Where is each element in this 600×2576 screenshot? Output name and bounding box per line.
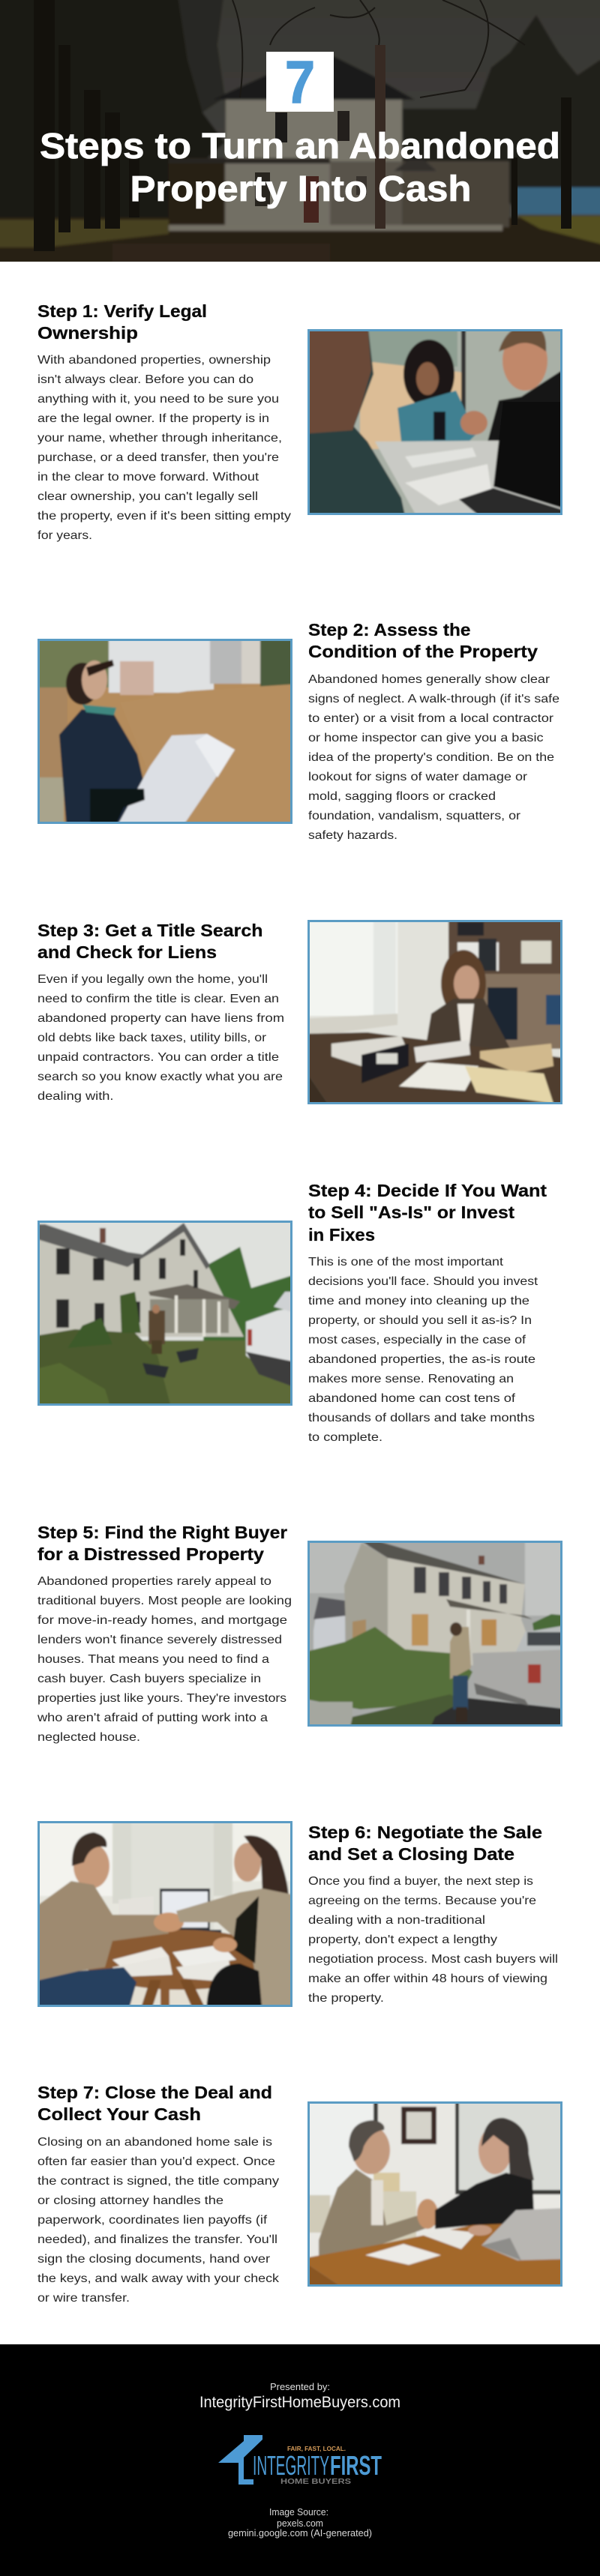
step 6 heading (308, 1823, 542, 1864)
step 2 heading: Step 2: Assess the (308, 620, 471, 640)
step 4 text: abandoned properties, the as-is route (308, 1353, 536, 1366)
step 7 text: often far easier than you'd expect. Once (38, 2155, 275, 2168)
panel: step 6 (30, 1814, 558, 2014)
step 2 text: lookout for signs of water damage or (308, 771, 528, 783)
step 4 text: This is one of the most important (308, 1256, 504, 1269)
step 3 photo: woman at a desk with title files (300, 912, 570, 1112)
title: Steps to Turn an Abandoned (40, 127, 560, 166)
step 3 heading: and Check for Liens (38, 942, 217, 962)
step 2 text: mold, sagging floors or cracked (308, 790, 496, 803)
step 1 heading: Ownership (38, 323, 138, 343)
step 4 text: thousands of dollars and take months (308, 1412, 535, 1424)
step 7 text: sign the closing documents, hand over (38, 2253, 271, 2266)
step 4 text: to complete. (308, 1431, 382, 1444)
logo text: FAIR, FAST, LOCAL. (287, 2445, 346, 2452)
step 1 heading (38, 301, 207, 343)
step 4 text: abandoned home can cost tens of (308, 1392, 516, 1405)
step 4 heading: in Fixes (308, 1225, 375, 1245)
step 4 heading: to Sell "As-Is" or Invest (308, 1203, 514, 1222)
step 5 text (37, 1575, 292, 1744)
presented by: Presented by: (270, 2381, 330, 2392)
step 5 text: lenders won't finance severely distressed (38, 1634, 282, 1646)
number seven badge (266, 49, 334, 115)
panel: step 4 (30, 1181, 547, 1444)
step 1 text: your name, whether through inheritance, (38, 432, 282, 445)
image sources: gemini.google.com (AI-generated) (228, 2528, 372, 2539)
title (40, 127, 560, 209)
step 5 text: houses. That means you need to find a (38, 1653, 269, 1666)
step 2 text: to enter) or a visit from a local contractor (308, 712, 554, 725)
step 3 heading (38, 921, 262, 962)
panel: step 7 (38, 2083, 570, 2305)
step 7 text: Closing on an abandoned home sale is (38, 2136, 272, 2149)
step 3 text: need to confirm the title is clear. Even an (38, 993, 279, 1005)
image sources: Image Source: (269, 2507, 328, 2518)
image sources (228, 2507, 372, 2539)
step 4 photo: neglected white farmhouse with truck (30, 1213, 300, 1413)
step 5 text: traditional buyers. Most people are looking (38, 1595, 292, 1607)
step 2 text: Abandoned homes generally show clear (308, 673, 550, 686)
step 5 text: properties just like yours. They're investors (38, 1692, 286, 1705)
step 3 heading: Step 3: Get a Title Search (38, 921, 262, 940)
logo text: FIRST (330, 2450, 382, 2481)
step 1 heading: Step 1: Verify Legal (38, 301, 207, 321)
number seven badge: 7 (285, 49, 315, 115)
step 6 heading: and Set a Closing Date (308, 1844, 514, 1864)
step 1 text: purchase, or a deed transfer, then you're (38, 451, 279, 464)
footer (0, 2344, 600, 2576)
logo: Integrity First Home Buyers (218, 2435, 382, 2486)
step 6 text: property, don't expect a lengthy (308, 1933, 497, 1946)
step 4 text: most cases, especially in the case of (308, 1334, 526, 1346)
step 7 text (38, 2136, 280, 2305)
step 4 text: makes more sense. Renovating an (308, 1373, 514, 1385)
step 1 text (38, 354, 291, 542)
step 1 text: With abandoned properties, ownership (38, 354, 271, 367)
step 5 photo: boarded-up house, man and pickup (300, 1533, 570, 1734)
step 2 text: signs of neglect. A walk-through (if it's safe (308, 693, 560, 705)
step 2 text: foundation, vandalism, squatters, or (308, 810, 521, 822)
step 1 text: the property, even if it's been sitting empty (38, 510, 291, 523)
step 7 text: the contract is signed, the title company (38, 2175, 279, 2188)
panel: step 3 (38, 912, 570, 1112)
hero photo: abandoned house at dusk (0, 0, 600, 262)
hero banner (0, 0, 600, 285)
step 7 text: or closing attorney handles the (38, 2194, 224, 2207)
step 7 heading: Collect Your Cash (38, 2104, 201, 2124)
step 2 photo: woman holding blueprints (30, 631, 300, 831)
step 6 photo: handshake over a table (30, 1814, 300, 2014)
panel: step 2 (30, 620, 560, 842)
step 5 text: neglected house. (38, 1731, 140, 1744)
step 4 heading (308, 1181, 547, 1245)
step 7 text: or wire transfer. (38, 2292, 130, 2305)
step 6 text: make an offer within 48 hours of viewing (308, 1972, 548, 1985)
step 2 text: idea of the property's condition. Be on the (308, 751, 554, 764)
logo text: INTEGRITY (253, 2450, 329, 2481)
step 2 heading (308, 620, 538, 661)
step 4 text (308, 1256, 538, 1444)
step 3 text: abandoned property can have liens from (38, 1012, 284, 1025)
presented by: IntegrityFirstHomeBuyers.com (200, 2394, 400, 2411)
step 1 photo: three people at a meeting table (300, 322, 570, 523)
step 6 heading: Step 6: Negotiate the Sale (308, 1823, 542, 1842)
panel: step 5 (37, 1523, 570, 1744)
step 4 text: decisions you'll face. Should you invest (308, 1275, 538, 1288)
panel: step 1 (38, 301, 570, 542)
step 6 text: agreeing on the terms. Because you're (308, 1895, 536, 1907)
step 1 text: for years. (38, 529, 92, 542)
step 5 heading (38, 1523, 287, 1564)
step 2 text: or home inspector can give you a basic (308, 732, 543, 744)
step 5 text: who aren't afraid of putting work into a (37, 1712, 268, 1724)
step 5 text: for move-in-ready homes, and mortgage (38, 1614, 287, 1627)
presented by (200, 2381, 400, 2411)
step 1 text: in the clear to move forward. Without (38, 471, 260, 484)
step 2 heading: Condition of the Property (308, 642, 538, 661)
step 3 text: Even if you legally own the home, you'll (38, 973, 268, 986)
step 4 text: time and money into cleaning up the (308, 1295, 530, 1307)
step 3 text: search so you know exactly what you are (38, 1071, 283, 1083)
step 7 text: the keys, and walk away with your check (38, 2272, 280, 2285)
step 7 text: paperwork, coordinates lien payoffs (if (38, 2214, 268, 2227)
step 4 heading: Step 4: Decide If You Want (308, 1181, 547, 1200)
step 2 text: safety hazards. (308, 829, 398, 842)
step 3 text: old debts like back taxes, utility bills, or (38, 1032, 267, 1044)
step 3 text: unpaid contractors. You can order a title (38, 1051, 279, 1064)
step 7 heading (38, 2083, 272, 2124)
image sources: pexels.com (277, 2518, 323, 2529)
step 6 text: Once you find a buyer, the next step is (308, 1875, 533, 1888)
logo text: HOME BUYERS (280, 2477, 351, 2486)
step 7 photo: handshake at an office desk (300, 2094, 570, 2294)
title: Property Into Cash (130, 169, 471, 209)
step 3 text: dealing with. (38, 1090, 114, 1103)
step 1 text: anything with it, you need to be sure you (38, 393, 279, 406)
step 1 text: isn't always clear. Before you can do (38, 373, 254, 386)
step 6 text: the property. (308, 1992, 384, 2005)
step 3 text (38, 973, 284, 1103)
step 1 text: clear ownership, you can't legally sell (38, 490, 258, 503)
step 6 text (308, 1875, 558, 2005)
step 4 text: property, or should you sell it as-is? In (308, 1314, 532, 1327)
step 5 heading: for a Distressed Property (38, 1544, 264, 1564)
logo text (253, 2445, 382, 2486)
step 7 heading: Step 7: Close the Deal and (38, 2083, 272, 2102)
step 5 heading: Step 5: Find the Right Buyer (38, 1523, 287, 1542)
step 7 text: needed), and finalizes the transfer. You'll (38, 2233, 278, 2246)
step 2 text (308, 673, 560, 842)
step 6 text: negotiation process. Most cash buyers will (308, 1953, 558, 1966)
step 6 text: dealing with a non-traditional (308, 1914, 485, 1927)
step 5 text: cash buyer. Cash buyers specialize in (38, 1673, 261, 1685)
step 1 text: are the legal owner. If the property is in (38, 412, 269, 425)
step 5 text: Abandoned properties rarely appeal to (38, 1575, 272, 1588)
logo icon: house outline (218, 2435, 262, 2485)
